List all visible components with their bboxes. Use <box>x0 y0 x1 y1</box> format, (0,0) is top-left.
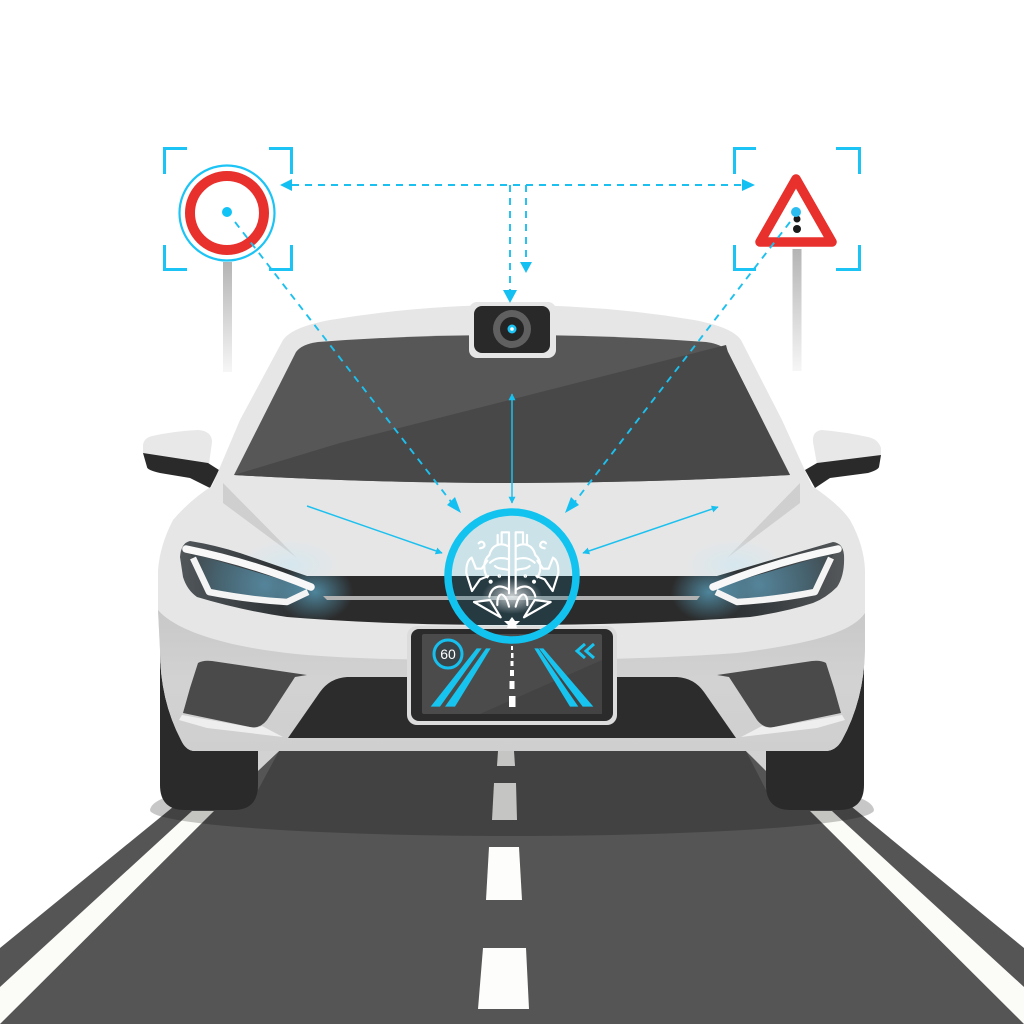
lens glass <box>452 516 572 625</box>
road centre dashes <box>478 751 529 1009</box>
speed badge: 60 <box>440 646 456 662</box>
detection brackets <box>164 148 292 270</box>
left mirror <box>143 430 219 488</box>
lower grille <box>288 677 736 738</box>
sign post <box>223 262 232 372</box>
brain icon <box>466 532 558 617</box>
sign ring <box>180 166 274 260</box>
fog lamp left <box>179 661 307 737</box>
warning brackets <box>734 148 860 270</box>
wheels <box>160 640 864 810</box>
display centre line <box>509 646 516 707</box>
windshield <box>234 335 790 483</box>
car body <box>158 305 865 751</box>
car <box>143 305 881 810</box>
brain output marker <box>504 617 520 628</box>
hood creases <box>223 483 800 558</box>
warning post <box>792 249 802 371</box>
road gaps beside wheels <box>258 751 766 771</box>
right hemisphere <box>516 532 558 617</box>
chevrons <box>577 644 594 658</box>
dashed detection arrows <box>235 185 790 503</box>
grille band and headlights <box>180 539 844 625</box>
warning triangle <box>760 179 832 242</box>
car ground shadow <box>150 751 874 836</box>
camera module <box>469 302 556 358</box>
right mirror <box>805 430 881 488</box>
AI brain lens <box>407 505 617 725</box>
left hemisphere <box>466 532 509 617</box>
road <box>0 751 1024 1024</box>
lane guides <box>431 648 593 707</box>
speed badge <box>434 640 462 668</box>
lower bumper <box>158 610 865 751</box>
fog lamp right <box>717 661 845 737</box>
arrowheads <box>280 179 755 513</box>
speed limit sign <box>164 148 292 372</box>
solid data-flow arrows <box>307 394 718 553</box>
lens ring <box>448 512 576 640</box>
warning sign <box>734 148 860 371</box>
dashboard display <box>407 626 617 725</box>
